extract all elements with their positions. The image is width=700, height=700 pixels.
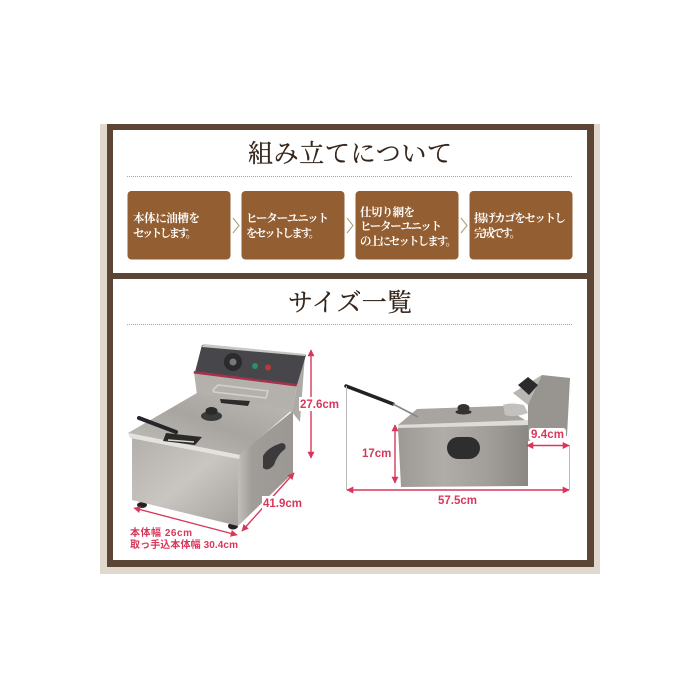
step 4: 揚げカゴをセットし <box>474 211 566 225</box>
step 1: セットします。 <box>133 227 197 240</box>
dimension: height 27.6cm <box>299 350 339 458</box>
dimension: 9.4cm <box>527 428 569 446</box>
dimension: depth 41.9cm: 41.9cm <box>263 498 302 510</box>
panel: assembly <box>127 140 573 260</box>
dimension: 57.5cm: 57.5cm <box>438 495 477 507</box>
step 2: ヒーターユニット <box>246 212 329 225</box>
step 4: 完成です。 <box>474 226 521 240</box>
arrow 1 <box>233 218 239 233</box>
dimension: width <box>130 508 238 551</box>
step 2 <box>242 191 344 260</box>
step 4 <box>470 191 572 260</box>
dimension: 17cm: 17cm <box>362 448 391 460</box>
step 3: ヒーターユニット <box>360 220 442 233</box>
step 2: をセットします。 <box>246 227 320 240</box>
dimension: height 27.6cm: 27.6cm <box>300 399 339 411</box>
dimension: 17cm <box>362 425 395 483</box>
dimension: width: 取っ手込本体幅 30.4cm <box>130 538 238 551</box>
heading: assembly: 組み立てについて <box>248 140 452 168</box>
fryer: side view <box>346 375 570 487</box>
heading: sizes: サイズ一覧 <box>288 289 412 317</box>
dimension: depth 41.9cm <box>242 473 303 531</box>
fryer: three-quarter view <box>128 344 306 530</box>
dimension: width: 本体幅 26cm <box>130 526 192 539</box>
arrow 2 <box>347 218 353 233</box>
step 1 <box>128 191 230 260</box>
step 3 <box>356 191 458 260</box>
step 3: の上にセットします。 <box>360 234 457 248</box>
dimension: 9.4cm: 9.4cm <box>531 429 564 441</box>
arrow 3 <box>461 218 467 233</box>
step 3: 仕切り網を <box>360 205 415 219</box>
outer frame <box>100 124 600 574</box>
step 1: 本体に油槽を <box>133 211 200 225</box>
panel: sizes <box>127 289 573 551</box>
